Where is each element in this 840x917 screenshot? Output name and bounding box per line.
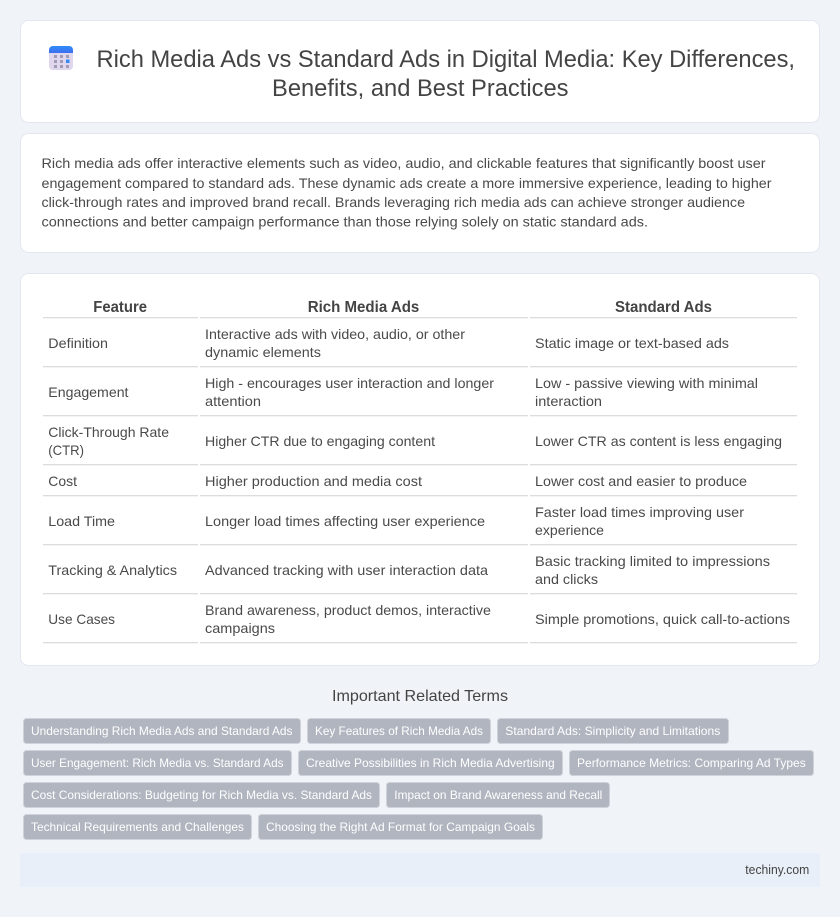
row: Engagement: Engagement — [48, 384, 129, 400]
table header: Rich Media Ads — [308, 299, 419, 316]
chip — [24, 782, 380, 808]
row: Engagement: Low - passive viewing with minimal — [535, 375, 758, 391]
row: Cost — [48, 473, 747, 489]
chip — [570, 750, 814, 776]
chip: Cost Considerations: Budgeting for Rich Media vs. Standard Ads — [31, 788, 372, 802]
row: Definition: Definition — [48, 335, 108, 351]
row: Engagement — [48, 375, 758, 409]
chip: Performance Metrics: Comparing Ad Types — [577, 756, 806, 770]
heading: Important Related Terms: Important Related Terms — [332, 688, 508, 705]
row: Tracking & Analytics: and clicks — [535, 571, 598, 587]
row: Load Time: Load Time — [48, 513, 115, 529]
chip — [386, 782, 610, 808]
chip — [24, 750, 292, 776]
chip — [298, 750, 562, 776]
chip: Key Features of Rich Media Ads — [315, 724, 483, 738]
table header: Standard Ads — [615, 299, 712, 316]
row: Click-Through Rate: (CTR) — [48, 442, 84, 458]
chip: Choosing the Right Ad Format for Campaign Goals — [266, 820, 535, 834]
row: Cost: Lower cost and easier to produce — [535, 473, 747, 489]
row: Use Cases: Use Cases — [48, 611, 115, 627]
chip — [308, 718, 490, 744]
chip — [24, 718, 300, 744]
row: Definition — [48, 326, 729, 360]
row: Use Cases: campaigns — [205, 620, 275, 636]
footer — [20, 853, 820, 887]
row: Engagement: High - encourages user interaction and longer — [205, 375, 494, 391]
chip: Impact on Brand Awareness and Recall — [394, 788, 602, 802]
chip: User Engagement: Rich Media vs. Standard Ads — [31, 756, 284, 770]
row: Engagement: interaction — [535, 393, 602, 409]
panel: comparison table — [20, 274, 820, 666]
row: Cost: Cost — [48, 473, 77, 489]
row: Click-Through Rate — [48, 424, 782, 458]
panel: introduction text: connections and better campaign performance than those relying solely on static standard ads. — [42, 214, 648, 230]
row: Definition: Interactive ads with video, audio, or other — [205, 326, 465, 342]
chip: Creative Possibilities in Rich Media Advertising — [306, 756, 555, 770]
row: Click-Through Rate: Higher CTR due to engaging content — [205, 433, 435, 449]
row: Definition: dynamic elements — [205, 344, 321, 360]
panel: related term chips — [24, 718, 814, 840]
row: Click-Through Rate: Lower CTR as content is less engaging — [535, 433, 782, 449]
footer: techiny.com — [745, 862, 809, 877]
chip — [258, 814, 542, 840]
panel: introduction text: Rich media ads offer interactive elements such as video, audio, and clickable features that significantly boost user — [42, 155, 766, 171]
title: Rich Media Ads vs Standard Ads in Digital Media: Key Differences, — [96, 46, 795, 73]
chip: Technical Requirements and Challenges — [31, 820, 244, 834]
table header — [93, 299, 712, 316]
title — [96, 46, 795, 102]
row: Engagement: attention — [205, 393, 261, 409]
row: Load Time: Faster load times improving user — [535, 504, 744, 520]
row: Tracking & Analytics: Basic tracking limited to impressions — [535, 553, 770, 569]
row: Load Time: experience — [535, 522, 604, 538]
icon: calendar — [49, 46, 73, 70]
chip — [24, 814, 252, 840]
row: Click-Through Rate: Click-Through Rate — [48, 424, 169, 440]
panel: title header — [20, 20, 820, 122]
row: Tracking & Analytics: Advanced tracking with user interaction data — [205, 562, 488, 578]
chip: Standard Ads: Simplicity and Limitations — [505, 724, 720, 738]
panel: introduction text: click-through rates and improved brand recall. Brands leveraging rich media ads can achieve stronger audience — [42, 194, 745, 210]
row: Tracking & Analytics: Tracking & Analytics — [48, 562, 177, 578]
row: Tracking & Analytics — [48, 553, 770, 587]
panel: introduction text — [20, 134, 820, 252]
row: Cost: Higher production and media cost — [205, 473, 422, 489]
panel: introduction text: engagement compared to standard ads. These dynamic ads create a more immersive experience, leading to higher — [42, 175, 772, 191]
row: Definition: Static image or text-based ads — [535, 335, 729, 351]
chip — [498, 718, 728, 744]
chip: Understanding Rich Media Ads and Standard Ads — [31, 724, 292, 738]
title: Benefits, and Best Practices — [272, 75, 568, 102]
row: Use Cases: Simple promotions, quick call-to-actions — [535, 611, 790, 627]
row: Use Cases — [48, 602, 790, 636]
row: Load Time — [48, 504, 744, 538]
table header: Feature — [93, 299, 147, 316]
row: Use Cases: Brand awareness, product demos, interactive — [205, 602, 491, 618]
row: Load Time: Longer load times affecting user experience — [205, 513, 485, 529]
